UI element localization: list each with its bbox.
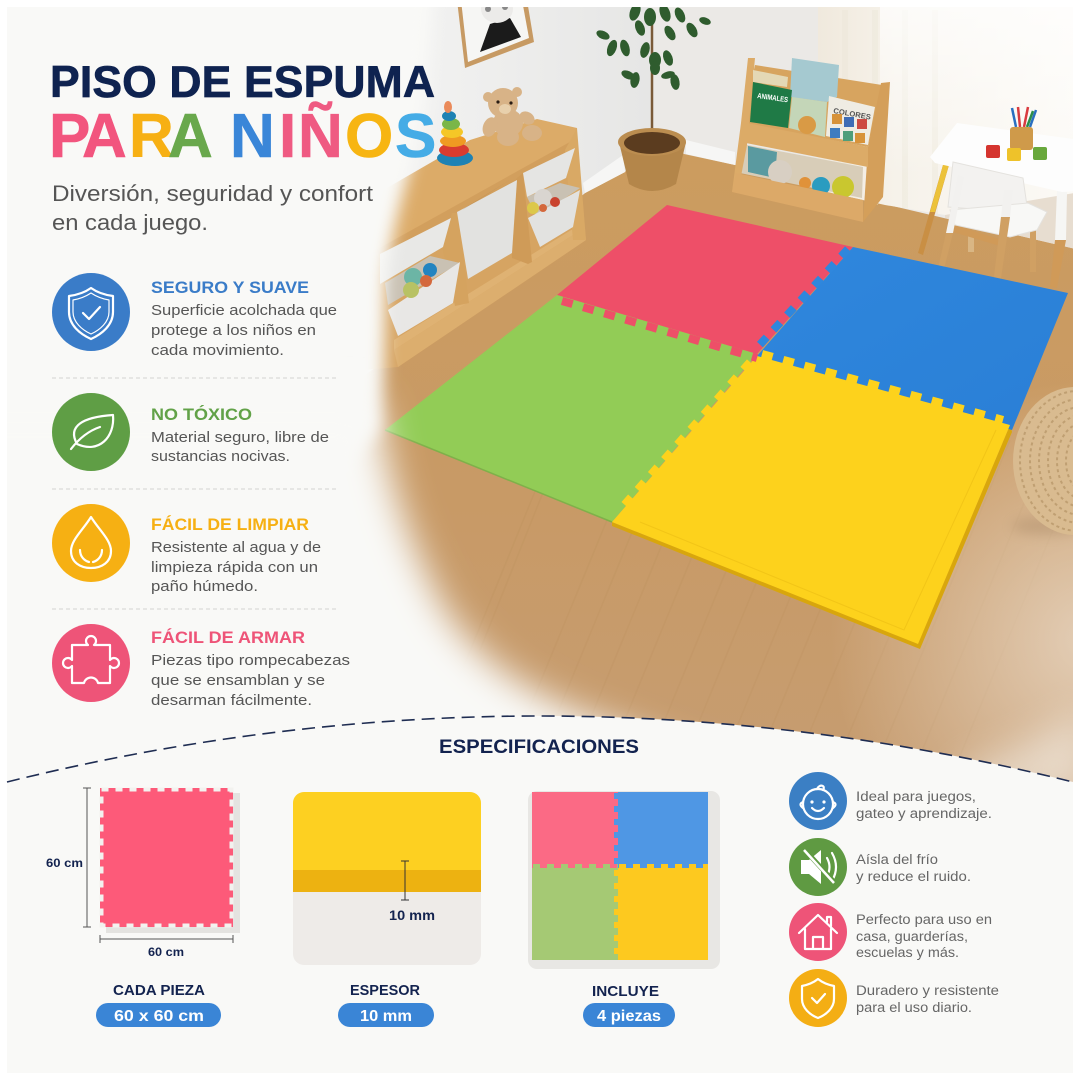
potted plant <box>596 7 711 128</box>
feature text: NO TÓXICO <box>151 405 252 424</box>
label: CADA PIEZA <box>113 982 205 999</box>
curtains <box>818 0 1080 215</box>
benefit text <box>856 912 992 960</box>
feature text <box>151 405 329 465</box>
benefit text: escuelas y más. <box>856 945 959 960</box>
knitted pouf <box>1012 387 1080 535</box>
benefit text: para el uso diario. <box>856 1000 972 1015</box>
unit top <box>378 119 577 248</box>
blue tile <box>757 247 1068 430</box>
size pill <box>96 1003 221 1027</box>
puzzle seams <box>562 249 1003 512</box>
feature text: paño húmedo. <box>151 578 258 595</box>
feature text: desarman fácilmente. <box>151 692 312 709</box>
icon: leaf <box>52 393 130 471</box>
unit body <box>372 174 572 369</box>
icon: puzzle piece <box>52 624 130 702</box>
right side <box>863 82 890 222</box>
toy cubes <box>986 145 1000 158</box>
foam cross section <box>293 792 481 965</box>
icon: muted speaker <box>789 838 847 896</box>
icon: baby face <box>789 772 847 830</box>
benefit: uso <box>789 903 992 961</box>
benefit: durable <box>789 969 999 1027</box>
subtitle: Diversión, seguridad y confort <box>52 181 373 206</box>
benefit text: Aísla del frío <box>856 852 938 867</box>
red tile <box>557 205 853 354</box>
feature: seguro y suave <box>52 273 337 359</box>
front band <box>396 143 568 243</box>
stacking ring toy <box>437 101 473 166</box>
title: PISO DE ESPUMA <box>50 58 435 107</box>
benefit text: Duradero y resistente <box>856 983 999 998</box>
feature: no tóxico <box>52 393 329 471</box>
cubby floor <box>394 230 572 350</box>
benefit text <box>856 789 992 821</box>
left post <box>454 294 469 306</box>
wooden bookshelf <box>732 58 890 222</box>
pencil cup <box>1010 107 1036 150</box>
spec: espesor <box>293 792 481 1027</box>
subtitle <box>52 181 373 235</box>
dimension: width <box>100 935 233 959</box>
woven basket pot <box>618 128 686 191</box>
benefit text: Perfecto para uso en <box>856 912 992 927</box>
icon: water drop <box>52 504 130 582</box>
books <box>790 58 839 102</box>
child table <box>918 107 1080 288</box>
benefit text <box>856 852 971 884</box>
wooden bookshelf: ANIMALES <box>757 91 789 104</box>
icon: shield check <box>789 969 847 1027</box>
dimension: thickness <box>389 861 435 923</box>
icon: shield <box>52 273 130 351</box>
four piece mat <box>528 791 720 969</box>
feature: fácil de armar <box>52 624 350 709</box>
benefit text: casa, guarderías, <box>856 929 968 944</box>
feature text <box>151 515 321 595</box>
thickness pill: 10 mm <box>360 1008 412 1025</box>
feature text: sustancias nocivas. <box>151 448 290 465</box>
specifications heading: ESPECIFICACIONES <box>439 737 639 758</box>
feature text: Piezas tipo rompecabezas <box>151 652 350 669</box>
yellow thickness <box>612 425 1012 649</box>
lower back <box>740 145 863 198</box>
lower specifications panel <box>7 716 1073 1073</box>
right post <box>565 128 586 240</box>
pink puzzle tile <box>100 788 240 933</box>
feature text: Resistente al agua y de <box>151 539 321 556</box>
benefit: ruido <box>789 838 971 896</box>
size pill: 60 x 60 cm <box>114 1008 204 1025</box>
lower items <box>748 146 777 178</box>
feature text <box>151 628 350 709</box>
benefit text: Ideal para juegos, <box>856 789 976 804</box>
room photo <box>362 7 1073 782</box>
fade near arc <box>960 710 1080 800</box>
child chair <box>946 162 1048 252</box>
wood floor <box>362 154 1073 782</box>
dimension: width: 60 cm <box>148 945 184 959</box>
framed panda picture <box>458 7 534 68</box>
foam mat <box>385 205 1068 649</box>
colored title line: PARA NIÑOS <box>49 102 436 171</box>
colored balls <box>403 189 560 298</box>
title <box>49 58 436 171</box>
feature: fácil de limpiar <box>52 504 321 595</box>
green tile <box>385 295 757 522</box>
walls <box>372 7 1073 370</box>
benefit text: y reduce el ruido. <box>856 869 971 884</box>
storage bins <box>380 218 451 284</box>
icon: house <box>789 903 847 961</box>
label: INCLUYE <box>592 983 659 1000</box>
spec: cada pieza <box>46 788 240 1027</box>
quantity pill <box>583 1003 675 1027</box>
wooden bookshelf: COLORES <box>833 106 872 122</box>
feature text: Material seguro, libre de <box>151 429 329 446</box>
dimension: thickness: 10 mm <box>389 907 435 923</box>
thickness pill <box>338 1003 434 1027</box>
ledge <box>741 122 868 167</box>
dimension: height <box>46 788 91 927</box>
feature text: protege a los niños en <box>151 322 316 339</box>
bottom ledge <box>394 228 586 367</box>
label: ESPESOR <box>350 982 420 999</box>
feature text: SEGURO Y SUAVE <box>151 279 309 297</box>
feature text: que se ensamblan y se <box>151 672 325 689</box>
photo fade upper <box>0 0 436 520</box>
wooden toy storage unit <box>372 119 586 369</box>
spec: incluye <box>528 791 720 1027</box>
feature text: FÁCIL DE ARMAR <box>151 628 305 647</box>
outer puzzle border <box>640 430 996 630</box>
yellow tile <box>612 356 1010 644</box>
left side <box>732 58 755 192</box>
dashed arc <box>7 716 1073 782</box>
feature text: limpieza rápida con un <box>151 559 318 576</box>
quantity pill: 4 piezas <box>597 1008 661 1025</box>
dimension: height: 60 cm <box>46 856 83 870</box>
subtitle: en cada juego. <box>52 210 208 235</box>
benefit text <box>856 983 999 1015</box>
base <box>732 173 863 222</box>
feature text: cada movimiento. <box>151 342 284 359</box>
benefit text: gateo y aprendizaje. <box>856 806 992 821</box>
middle post <box>512 178 532 264</box>
feature text: Superficie acolchada que <box>151 302 337 319</box>
photo fade lower <box>0 400 740 830</box>
back panel <box>742 65 882 147</box>
teddy bear <box>480 87 542 146</box>
feature text: FÁCIL DE LIMPIAR <box>151 515 309 534</box>
feature text <box>151 279 337 359</box>
benefit: juegos <box>789 772 992 830</box>
